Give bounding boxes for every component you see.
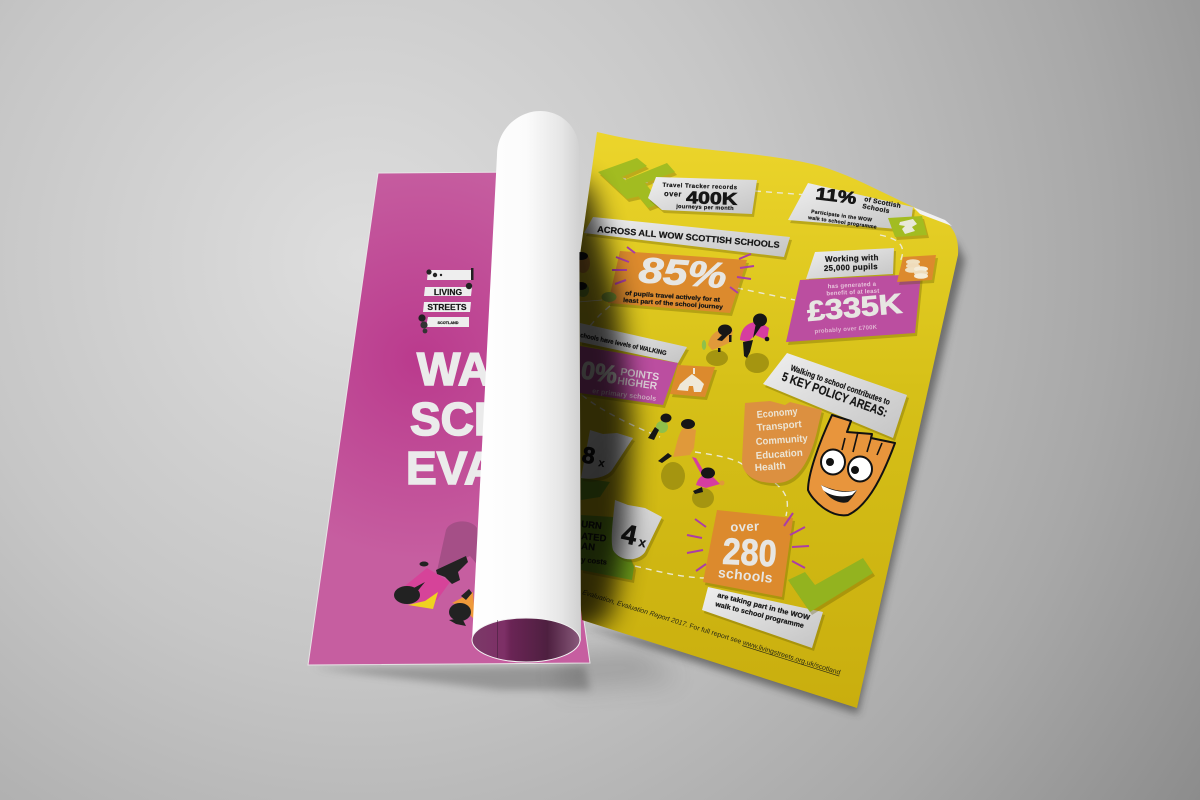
title: Walking to school evaluation: EVA [406, 442, 497, 494]
stat: £335K benefit: probably over £700K [814, 325, 878, 335]
title: Walking to school evaluation [406, 343, 507, 494]
callout: Travel Tracker 400K: journeys per month [675, 204, 734, 212]
shadow cast by roll [579, 166, 652, 632]
page shadows [312, 240, 965, 714]
stat: £335K benefit: benefit of at least [826, 289, 880, 297]
stat: percentage points higher: POINTS [620, 366, 660, 383]
badge: 4x: 4 [619, 519, 640, 551]
callout: taking part in WOW: are taking part in the WOW [717, 592, 811, 622]
panel: green return box: y costs [581, 555, 607, 567]
panel: green return box: AN [581, 541, 596, 553]
stat: £335K benefit: has generated a [827, 282, 877, 290]
callout: Working with 25,000 pupils: Working with [825, 253, 879, 264]
callout: taking part in WOW: walk to school programme [714, 601, 805, 630]
stat: 85% of pupils: least part of the school journey [623, 297, 724, 311]
shield: policy list: Health [754, 461, 786, 474]
illustration: two children walking [702, 314, 769, 373]
callout: taking part in WOW [702, 587, 823, 648]
logo: Living Streets Scotland: LIVING [434, 287, 463, 297]
badge: 8x: 8 [580, 441, 597, 469]
stat: 85% of pupils: 85% [637, 249, 728, 296]
panel: pink front cover [308, 172, 590, 665]
title: Walking to school evaluation: WA [417, 343, 491, 395]
banner: schools have levels of walking: chools have levels of WALKING [580, 332, 667, 357]
panel: green return box: ATED [581, 531, 607, 545]
banner: Across all WOW Scottish schools: ACROSS ALL WOW SCOTTISH SCHOOLS [597, 224, 780, 250]
callout: 11% of Scottish Schools: 11% [815, 184, 858, 208]
callout: 11% of Scottish Schools: walk to school programme [807, 215, 877, 231]
stat: 85% of pupils [608, 247, 754, 313]
shield: policy list [742, 401, 822, 483]
callout: Working with 25,000 pupils [806, 248, 894, 279]
callout: Travel Tracker 400K: 400K [686, 188, 738, 209]
shield: policy list: Community [755, 433, 808, 448]
badge: 8x: x [597, 457, 606, 470]
stat: over 280 schools: 280 [722, 531, 778, 574]
callout: 11% of Scottish Schools: Schools [862, 203, 890, 215]
callout: 11% of Scottish Schools [788, 183, 913, 231]
callout: 11% of Scottish Schools: Participate in the WOW [811, 209, 873, 224]
badge: 8x [580, 430, 633, 479]
callout: 5 key policy areas [763, 353, 907, 438]
paper roll [472, 111, 581, 662]
panel: green return box: URN [581, 519, 602, 532]
stat: percentage points higher: HIGHER [617, 375, 658, 393]
illustration: family walking [648, 414, 724, 508]
icon: school building [670, 365, 715, 397]
logo: Living Streets Scotland: STREETS [427, 302, 467, 312]
route: dashed path [582, 178, 903, 578]
stat: percentage points higher: er primary schools [592, 388, 657, 403]
inner roll opening [472, 618, 580, 662]
callout: 5 key policy areas: Walking to school contributes to [789, 363, 891, 407]
callout: Working with 25,000 pupils: 25,000 pupils [824, 262, 878, 273]
banner: Across all WOW Scottish schools [584, 217, 790, 257]
callout: 11% of Scottish Schools: of Scottish [864, 196, 902, 210]
icon: coins [897, 255, 936, 282]
logo: Living Streets Scotland [418, 268, 474, 333]
icon: Scotland map [888, 216, 927, 237]
footer: source and link: Evaluation, Evaluation Report 2017. For full report see www.livingstreets.org.uk/scotland [581, 589, 841, 677]
illustration: children beside the roll [574, 252, 616, 302]
banner: schools have levels of walking [580, 323, 687, 363]
shield: policy list: Transport [756, 419, 803, 434]
title: Walking to school evaluation: SCH [410, 393, 507, 445]
shield: policy list: Education [755, 448, 803, 462]
panel: green return box [581, 478, 634, 580]
stat: over 280 schools [687, 510, 809, 597]
stat: 85% of pupils: of pupils travel actively for at [625, 290, 720, 304]
stat: percentage points higher [579, 346, 678, 405]
logo: Living Streets Scotland: SCOTLAND [437, 321, 459, 325]
stat: £335K benefit [786, 274, 921, 342]
shield: policy list: Economy [756, 406, 798, 421]
panel: yellow inner page [540, 132, 958, 708]
stat: £335K benefit: £335K [806, 288, 903, 327]
icon: green tick [788, 558, 873, 612]
badge: 4x [612, 500, 662, 559]
badge: 4x: x [637, 534, 648, 551]
callout: Travel Tracker 400K: Travel Tracker records [662, 183, 738, 191]
mascot: smiling face [808, 415, 895, 515]
callout: 5 key policy areas: 5 KEY POLICY AREAS: [780, 370, 889, 420]
stat: percentage points higher: 0% [579, 356, 619, 390]
stat: over 280 schools: schools [717, 564, 774, 586]
illustration: walking people on cover [394, 521, 480, 626]
callout: Travel Tracker 400K [648, 177, 757, 214]
stat: over 280 schools: over [730, 519, 760, 535]
callout: Travel Tracker 400K: over [664, 189, 682, 199]
icon: green chevrons [598, 158, 675, 208]
